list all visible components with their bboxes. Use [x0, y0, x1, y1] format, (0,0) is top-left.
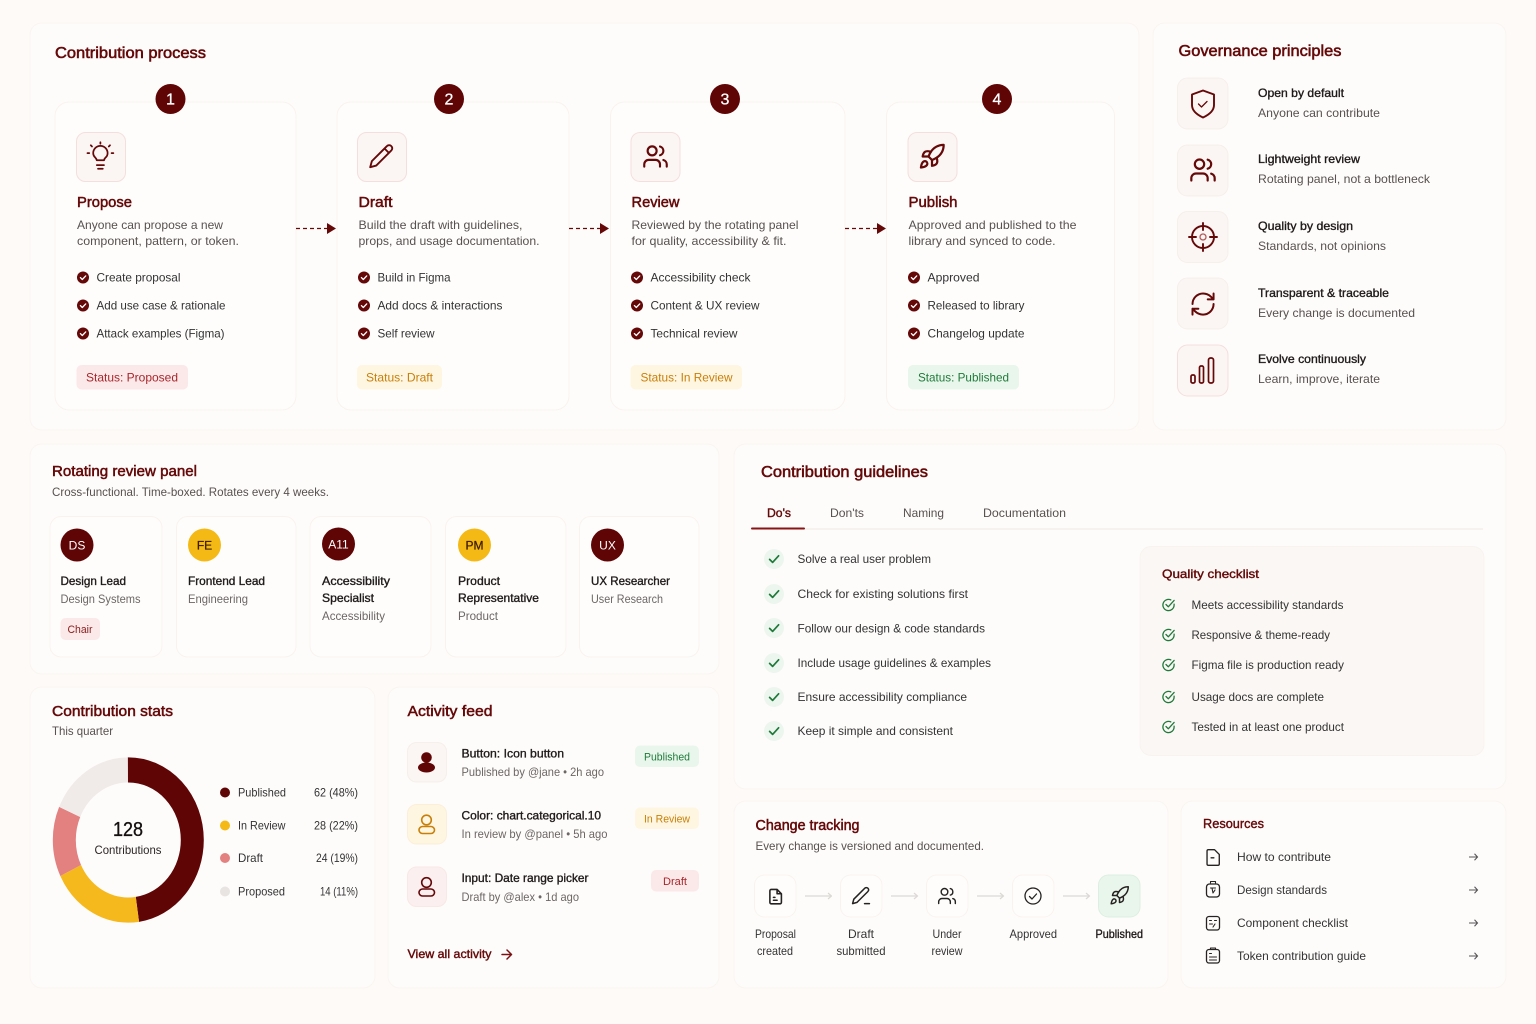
checklist: publish: Released to library [928, 298, 1024, 312]
principle: evolve continuously: Learn, improve, iterate [1258, 372, 1380, 386]
member card: ux researcher [580, 516, 699, 657]
legend: Proposed [238, 884, 285, 898]
step number 4 [982, 84, 1012, 114]
activity: date range picker: Input: Date range picker [462, 871, 588, 885]
panel: resources [1181, 801, 1506, 988]
heading: rotating review panel: Rotating review panel [52, 464, 197, 480]
title: publish: Publish [908, 195, 958, 211]
description: draft [358, 218, 540, 248]
member card: frontend lead [176, 516, 296, 657]
activity: chart categorical: In Review [644, 814, 690, 826]
description: publish [908, 218, 1077, 248]
panel: contribution guidelines [734, 444, 1506, 789]
principle: transparent and traceable [1178, 278, 1415, 329]
activity: date range picker: Draft by @alex • 1d ago [462, 890, 579, 904]
activity: icon button: Published [644, 752, 690, 764]
icon: users [631, 132, 680, 182]
member card: product representative [446, 516, 566, 657]
panel: change tracking [734, 801, 1168, 988]
icon: rocket [908, 132, 957, 182]
subheading: this quarter: This quarter [52, 724, 113, 738]
principle: lightweight review: Lightweight review [1258, 152, 1360, 166]
status pill: draft [357, 365, 442, 390]
member card: ux researcher: User Research [591, 592, 663, 606]
status pill: in review: Status: In Review [640, 370, 733, 384]
quality checklist: Usage docs are complete [1192, 690, 1324, 704]
step number 3: 3 [721, 92, 730, 108]
checklist: propose: Attack examples (Figma) [96, 326, 225, 340]
member card: accessibility specialist: A11 [328, 538, 349, 552]
member card: ux researcher: UX Researcher [591, 574, 670, 588]
step number 1: 1 [166, 92, 175, 108]
resource: component checklist [1206, 916, 1478, 930]
step card: propose [55, 84, 296, 410]
resource: how to contribute [1207, 850, 1478, 865]
checklist: propose: Create proposal [96, 270, 180, 284]
link: view all activity: View all activity [408, 947, 492, 961]
quality checklist: Figma file is production ready [1192, 658, 1344, 672]
tabs [751, 506, 1483, 530]
member card: frontend lead: FE [197, 538, 212, 552]
activity: date range picker: Draft [663, 876, 687, 888]
member card: design lead: Design Lead [60, 574, 126, 588]
heading: governance principles: Governance principles [1178, 43, 1342, 60]
description: review: Reviewed by the rotating panel [632, 218, 798, 232]
arrow: propose to draft [296, 223, 336, 234]
stage: approved [1010, 875, 1057, 941]
legend: 14 (11%) [320, 884, 358, 898]
stage: approved: Approved [1010, 927, 1057, 941]
quality checklist: Tested in at least one product [1192, 720, 1345, 734]
checklist: draft: Add docs & interactions [378, 298, 502, 312]
tabs: Documentation [983, 506, 1066, 520]
legend: 28 (22%) [314, 818, 358, 832]
member card: product representative: Representative [458, 591, 539, 605]
heading: resources: Resources [1203, 816, 1264, 831]
tabs: Naming [903, 506, 944, 520]
stage: under review: Under [932, 927, 962, 941]
legend: 24 (19%) [316, 851, 358, 865]
resource: how to contribute: How to contribute [1237, 850, 1331, 864]
resource: design standards: Design standards [1237, 883, 1327, 897]
principle: lightweight review [1178, 145, 1431, 196]
status pill: proposed [76, 365, 188, 390]
panel: rotating review panel [30, 444, 719, 674]
icon: lightbulb [76, 132, 126, 182]
list: do's: Solve a real user problem [798, 552, 931, 566]
status pill: draft: Status: Draft [366, 370, 434, 384]
step number 2 [434, 84, 464, 114]
principle: transparent and traceable: Transparent & traceable [1258, 286, 1389, 300]
activity: icon button [408, 742, 699, 782]
member card: frontend lead: Frontend Lead [188, 574, 265, 588]
activity: chart categorical: In review by @panel • 5h ago [462, 827, 608, 841]
member card: design lead: DS [69, 538, 85, 552]
legend: Published [238, 786, 286, 800]
checklist: review: Content & UX review [650, 298, 760, 312]
checklist: propose [77, 270, 226, 340]
activity: icon button: Published by @jane • 2h ago [462, 765, 604, 779]
arrow [805, 893, 832, 899]
checklist: publish: Approved [928, 270, 980, 284]
arrow: draft to review [569, 223, 609, 234]
legend [220, 786, 358, 898]
member card: design lead: Design Systems [60, 592, 140, 606]
stage: published: Published [1096, 927, 1143, 941]
description: propose: Anyone can propose a new [77, 218, 223, 232]
principle: transparent and traceable: Every change is documented [1258, 306, 1415, 320]
member card: accessibility specialist: Accessibility [322, 609, 385, 623]
stage: draft submitted: Draft [848, 927, 875, 941]
activity: icon button: Button: Icon button [462, 746, 564, 760]
quality checklist: Responsive & theme-ready [1192, 628, 1330, 642]
principle: quality by design: Quality by design [1258, 219, 1353, 233]
donut chart [64, 770, 192, 910]
resource: token contribution guide [1206, 948, 1478, 963]
principle: quality by design: Standards, not opinions [1258, 239, 1386, 253]
principle: open by default: Anyone can contribute [1258, 106, 1380, 120]
member card: frontend lead: Engineering [188, 592, 248, 606]
member card: product representative: Product [458, 609, 499, 623]
subheading: rotating review panel: Cross-functional. Time-boxed. Rotates every 4 weeks. [52, 485, 329, 499]
step card: review [610, 84, 845, 410]
stage: under review [926, 875, 968, 958]
description: review [632, 218, 798, 248]
stage: published [1096, 875, 1143, 941]
resource: component checklist: Component checklist [1237, 916, 1349, 930]
activity: date range picker [408, 867, 699, 906]
icon: pencil [358, 132, 406, 182]
resource: token contribution guide: Token contribution guide [1237, 949, 1366, 963]
member card: accessibility specialist: Specialist [322, 591, 375, 605]
stage: draft submitted [836, 875, 886, 958]
step number 2: 2 [445, 92, 454, 108]
list: do's: Follow our design & code standards [798, 622, 985, 636]
arrow [977, 893, 1004, 899]
activity: chart categorical [408, 804, 699, 844]
checklist: draft: Self review [378, 326, 435, 340]
step card: publish [886, 84, 1114, 410]
arrow: review to publish [845, 223, 886, 234]
step number 3 [710, 84, 740, 114]
member card: accessibility specialist [310, 516, 431, 657]
heading: contribution process: Contribution process [55, 45, 206, 62]
arrow [1063, 893, 1090, 899]
principle: lightweight review: Rotating panel, not a bottleneck [1258, 172, 1431, 186]
donut chart: 128 [113, 819, 143, 841]
checklist: review [631, 270, 760, 340]
resource: design standards [1206, 882, 1478, 897]
member card: product representative: Product [458, 574, 501, 588]
title: propose: Propose [77, 195, 132, 211]
legend: 62 (48%) [314, 786, 358, 800]
step number 1 [156, 84, 186, 114]
status pill: published: Status: Published [918, 370, 1009, 384]
description: review: for quality, accessibility & fit. [632, 234, 786, 248]
activity: chart categorical: Color: chart.categorical.10 [462, 808, 601, 822]
status pill: proposed: Status: Proposed [86, 370, 178, 384]
quality checklist: Quality checklist [1162, 567, 1260, 581]
principle: evolve continuously [1178, 345, 1380, 396]
panel: governance principles [1153, 23, 1506, 430]
heading: activity feed: Activity feed [408, 704, 492, 720]
status pill: published [908, 365, 1019, 390]
heading: change tracking: Change tracking [756, 818, 860, 834]
member card: accessibility specialist: Accessibility [322, 574, 390, 588]
status pill: in review [630, 365, 742, 390]
checklist: review: Accessibility check [650, 270, 751, 284]
principle: quality by design [1178, 212, 1386, 262]
panel: contribution process [30, 23, 1139, 430]
arrow [891, 893, 918, 899]
list: do's: Keep it simple and consistent [798, 724, 954, 738]
list: do's [764, 549, 991, 741]
checklist: draft: Build in Figma [378, 270, 451, 284]
tabs: Do's [767, 506, 791, 520]
quality checklist: Meets accessibility standards [1192, 598, 1344, 612]
heading: contribution stats: Contribution stats [52, 704, 173, 720]
description: draft: props, and usage documentation. [358, 234, 540, 248]
subheading: change tracking: Every change is versioned and documented. [756, 839, 984, 853]
heading: contribution guidelines: Contribution guidelines [761, 464, 928, 481]
list: do's: Check for existing solutions first [798, 587, 969, 601]
description: propose: component, pattern, or token. [77, 234, 239, 248]
checklist: draft [358, 270, 502, 340]
quality checklist [1140, 546, 1484, 756]
tabs: Don'ts [830, 506, 864, 520]
description: propose [77, 218, 239, 248]
panel: contribution stats [30, 687, 375, 988]
member card: design lead [50, 516, 162, 657]
stage: draft submitted: submitted [836, 944, 886, 958]
description: publish: library and synced to code. [908, 234, 1056, 248]
legend: In Review [238, 818, 286, 832]
legend: Draft [238, 851, 264, 865]
checklist: publish: Changelog update [928, 326, 1025, 340]
description: draft: Build the draft with guidelines, [358, 218, 522, 232]
checklist: propose: Add use case & rationale [96, 298, 226, 312]
stage: under review: review [932, 944, 963, 958]
list: do's: Include usage guidelines & examples [798, 656, 991, 670]
step card: draft [337, 84, 569, 410]
stage: proposal created: created [757, 944, 793, 958]
checklist: publish [908, 270, 1025, 340]
principle: open by default: Open by default [1258, 86, 1345, 100]
list: do's: Ensure accessibility compliance [798, 690, 967, 704]
panel: activity feed [388, 687, 719, 988]
title: review: Review [632, 195, 680, 211]
member card: design lead: Chair [68, 624, 93, 636]
principle: evolve continuously: Evolve continuously [1258, 352, 1366, 366]
donut chart: Contributions [94, 843, 162, 857]
member card: product representative: PM [466, 538, 484, 552]
checklist: review: Technical review [650, 326, 738, 340]
member card: ux researcher: UX [599, 538, 616, 552]
stage: proposal created [754, 875, 796, 958]
principle: open by default [1178, 78, 1380, 129]
step number 4: 4 [993, 92, 1002, 108]
stage: proposal created: Proposal [755, 927, 796, 941]
description: publish: Approved and published to the [908, 218, 1077, 232]
title: draft: Draft [358, 195, 392, 211]
